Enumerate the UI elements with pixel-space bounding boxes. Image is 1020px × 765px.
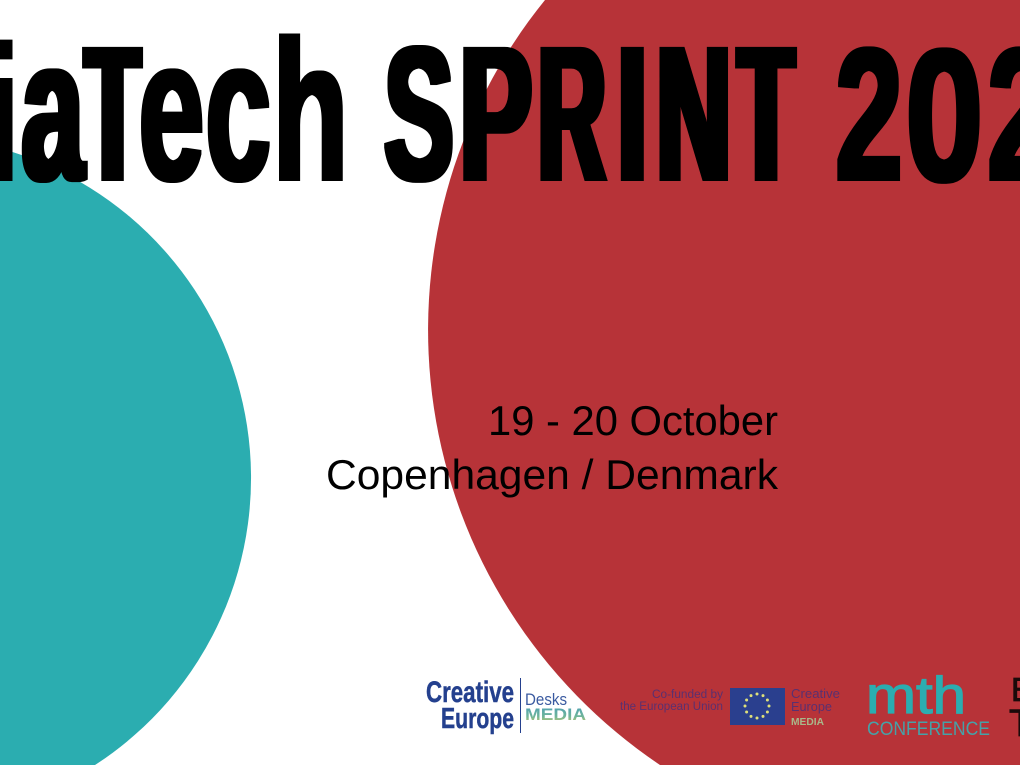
logo: Creative Europe Desks MEDIA: Desks [525, 690, 567, 709]
logo: mth conference: mth [866, 667, 966, 725]
title: S [384, 9, 454, 220]
date and location: 19 - 20 October [488, 397, 778, 444]
title: P [460, 6, 532, 223]
title: T [86, 4, 139, 222]
teal circle [0, 148, 251, 765]
title: a [22, 0, 85, 222]
title: N [657, 6, 731, 224]
logo: Co-funded by the European Union: MEDIA [791, 717, 824, 728]
title: 2 [835, 11, 903, 219]
logo: Creative Europe Desks MEDIA: MEDIA [525, 705, 586, 724]
title: T [739, 6, 793, 224]
title: h [272, 1, 348, 222]
title: 0 [905, 12, 983, 221]
title: R [538, 6, 606, 223]
title: e [138, 0, 204, 223]
logo: Creative Europe Desks MEDIA: Creative [426, 676, 514, 709]
date and location [326, 397, 779, 498]
title [0, 0, 1020, 224]
logo: partial cropped mark [1009, 671, 1020, 745]
logo: Creative Europe Desks MEDIA: Europe [441, 703, 514, 735]
logo: Co-funded by the European Union [620, 687, 840, 728]
icon: EU flag [730, 688, 785, 725]
red circle [428, 0, 1020, 765]
logo: Co-funded by the European Union: Europe [791, 700, 832, 714]
date and location: Copenhagen / Denmark [326, 451, 779, 498]
logo: Creative Europe Desks MEDIA [426, 676, 586, 735]
logo: Co-funded by the European Union: the European Union [620, 701, 723, 713]
logo: Co-funded by the European Union: Co-funded by [652, 689, 723, 701]
title: c [205, 0, 271, 223]
title: I [620, 5, 645, 223]
logo: mth conference: CONFERENCE [867, 719, 990, 740]
logo: Co-funded by the European Union: Creative [791, 687, 840, 701]
logo: mth conference [866, 667, 990, 740]
